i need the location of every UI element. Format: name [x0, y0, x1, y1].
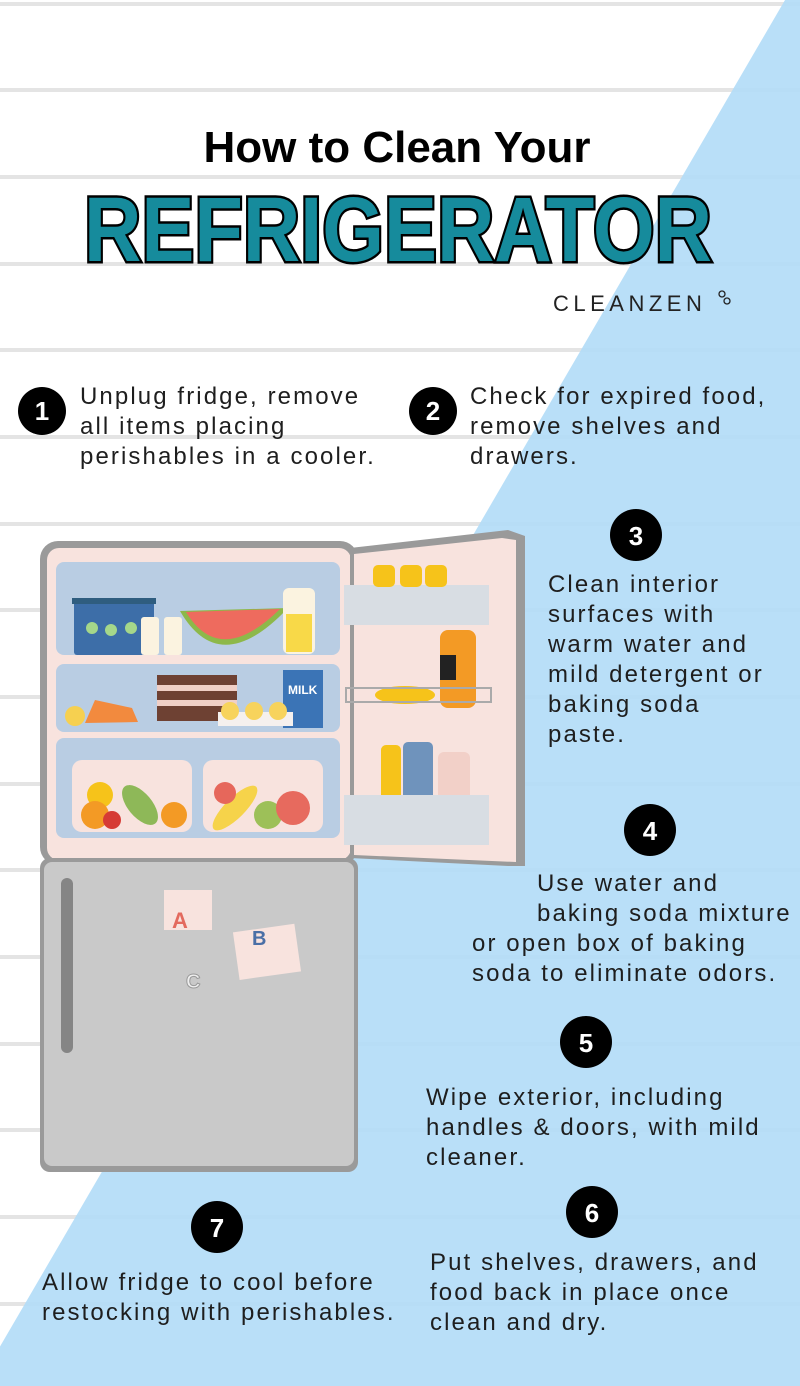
step 5: handles & doors, with mild: [426, 1114, 761, 1141]
step 6: food back in place once: [430, 1279, 730, 1306]
step 5: cleaner.: [426, 1144, 527, 1171]
step 3: 3: [629, 521, 643, 551]
illustration: open fridge: MILK: [288, 683, 318, 697]
step 3: paste.: [548, 721, 626, 748]
step 2: remove shelves and: [470, 413, 723, 440]
step 5: [426, 1016, 761, 1171]
step 3: warm water and: [547, 631, 748, 658]
step 3: surfaces with: [548, 601, 715, 628]
step 7: restocking with perishables.: [42, 1299, 396, 1326]
step 3: baking soda: [548, 691, 701, 718]
illustration: open fridge: C: [186, 971, 200, 993]
step 5: 5: [579, 1028, 593, 1058]
step 3: [547, 509, 764, 748]
illustration: open fridge: [40, 530, 525, 1172]
step 7: Allow fridge to cool before: [42, 1269, 375, 1296]
step 6: [430, 1186, 759, 1336]
step 1: [18, 383, 376, 470]
step 1: all items placing: [80, 413, 286, 440]
step 1: perishables in a cooler.: [80, 443, 376, 470]
illustration: open fridge: A: [172, 908, 188, 933]
illustration: open fridge: B: [252, 928, 266, 950]
step 7: [42, 1201, 396, 1326]
step 2: Check for expired food,: [470, 383, 766, 410]
step 1: Unplug fridge, remove: [80, 383, 360, 410]
step 3: Clean interior: [548, 571, 720, 598]
logo: CLEANZEN: CLEANZEN: [553, 291, 706, 316]
step 2: 2: [426, 396, 440, 426]
title: How to Clean Your: [203, 123, 591, 172]
step 4: [472, 804, 792, 987]
step 6: Put shelves, drawers, and: [430, 1249, 759, 1276]
step 4: 4: [643, 816, 658, 846]
step 6: 6: [585, 1198, 599, 1228]
step 4: baking soda mixture: [537, 900, 792, 927]
step 7: 7: [210, 1213, 224, 1243]
step 4: soda to eliminate odors.: [472, 960, 777, 987]
step 3: mild detergent or: [548, 661, 764, 688]
step 4: or open box of baking: [472, 930, 747, 957]
step 1: 1: [35, 396, 49, 426]
step 2: drawers.: [470, 443, 579, 470]
step 4: Use water and: [537, 870, 719, 897]
step 2: [409, 383, 766, 470]
step 5: Wipe exterior, including: [426, 1084, 725, 1111]
step 6: clean and dry.: [430, 1309, 608, 1336]
heading: REFRIGERATOR: REFRIGERATOR: [84, 179, 712, 281]
